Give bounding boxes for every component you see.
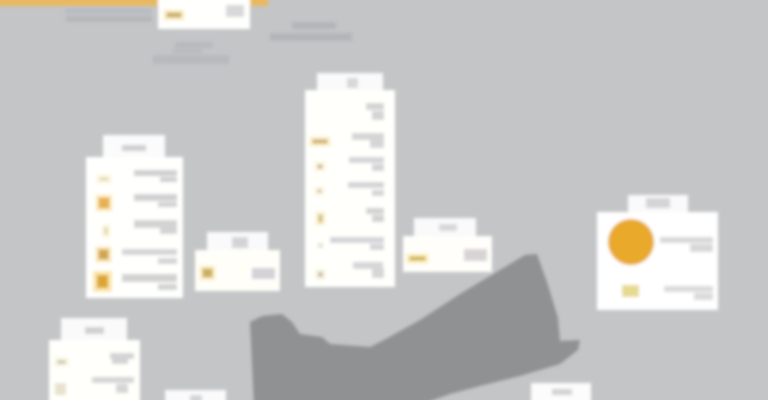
panel: center tall card bbox=[305, 73, 395, 287]
icon bbox=[408, 255, 427, 262]
icon row 1 bbox=[311, 138, 329, 145]
icon row 3 bbox=[316, 188, 323, 194]
icon row 5 bbox=[95, 273, 110, 290]
panel: small card center bbox=[403, 218, 492, 272]
panel: lower left card bbox=[49, 318, 140, 400]
icon row 6 bbox=[317, 271, 324, 278]
panel: lower center card bbox=[165, 390, 226, 400]
text row 2 bbox=[352, 133, 384, 148]
panel: left tall card bbox=[86, 135, 183, 298]
icon row 1 bbox=[56, 359, 67, 365]
text row 4 bbox=[122, 249, 177, 264]
icon row 2 bbox=[55, 383, 66, 395]
tab label bbox=[439, 224, 457, 231]
text row 5 bbox=[366, 208, 384, 222]
panel: lower right card bbox=[531, 383, 591, 400]
tab label bbox=[646, 198, 670, 208]
icon row 2 bbox=[97, 196, 111, 210]
caption right of top card bbox=[270, 22, 352, 41]
text row 6 bbox=[330, 237, 384, 250]
text row 1 bbox=[110, 353, 134, 364]
dark gray silhouette bbox=[250, 254, 580, 400]
icon row 5 bbox=[318, 243, 323, 248]
tab label bbox=[232, 237, 248, 248]
text: circle label bbox=[660, 237, 713, 252]
caption under top card bbox=[153, 42, 229, 64]
tab label bbox=[552, 389, 572, 395]
icon row 4 bbox=[317, 213, 324, 224]
text row 3 bbox=[134, 220, 177, 234]
text bbox=[252, 268, 275, 279]
icon row 2 bbox=[316, 163, 324, 170]
icon row 4 bbox=[97, 248, 110, 261]
text: marker label bbox=[664, 286, 713, 300]
tab label bbox=[85, 327, 104, 334]
text: top card bbox=[226, 5, 244, 17]
top banner bbox=[0, 0, 268, 22]
text row 7 bbox=[353, 262, 384, 278]
icon bbox=[201, 267, 214, 279]
icon: top card bbox=[165, 11, 183, 19]
text row 2 bbox=[92, 377, 134, 393]
text row 3 bbox=[349, 157, 384, 171]
text row 5 bbox=[122, 274, 177, 290]
text row 2 bbox=[134, 194, 177, 207]
panel: small card left bbox=[195, 232, 280, 291]
tab label bbox=[190, 395, 202, 400]
icon: small marker bbox=[622, 285, 639, 297]
icon row 3 bbox=[103, 226, 109, 236]
circle chart bbox=[608, 219, 654, 265]
tab label bbox=[122, 145, 146, 151]
text row 1 bbox=[366, 103, 384, 120]
text row 1 bbox=[134, 170, 177, 182]
text bbox=[464, 249, 487, 261]
panel: right card with circle bbox=[597, 195, 718, 310]
icon row 1 bbox=[98, 176, 110, 182]
panel: top card bbox=[158, 0, 250, 29]
text row 4 bbox=[348, 182, 384, 196]
tab label bbox=[347, 78, 358, 88]
